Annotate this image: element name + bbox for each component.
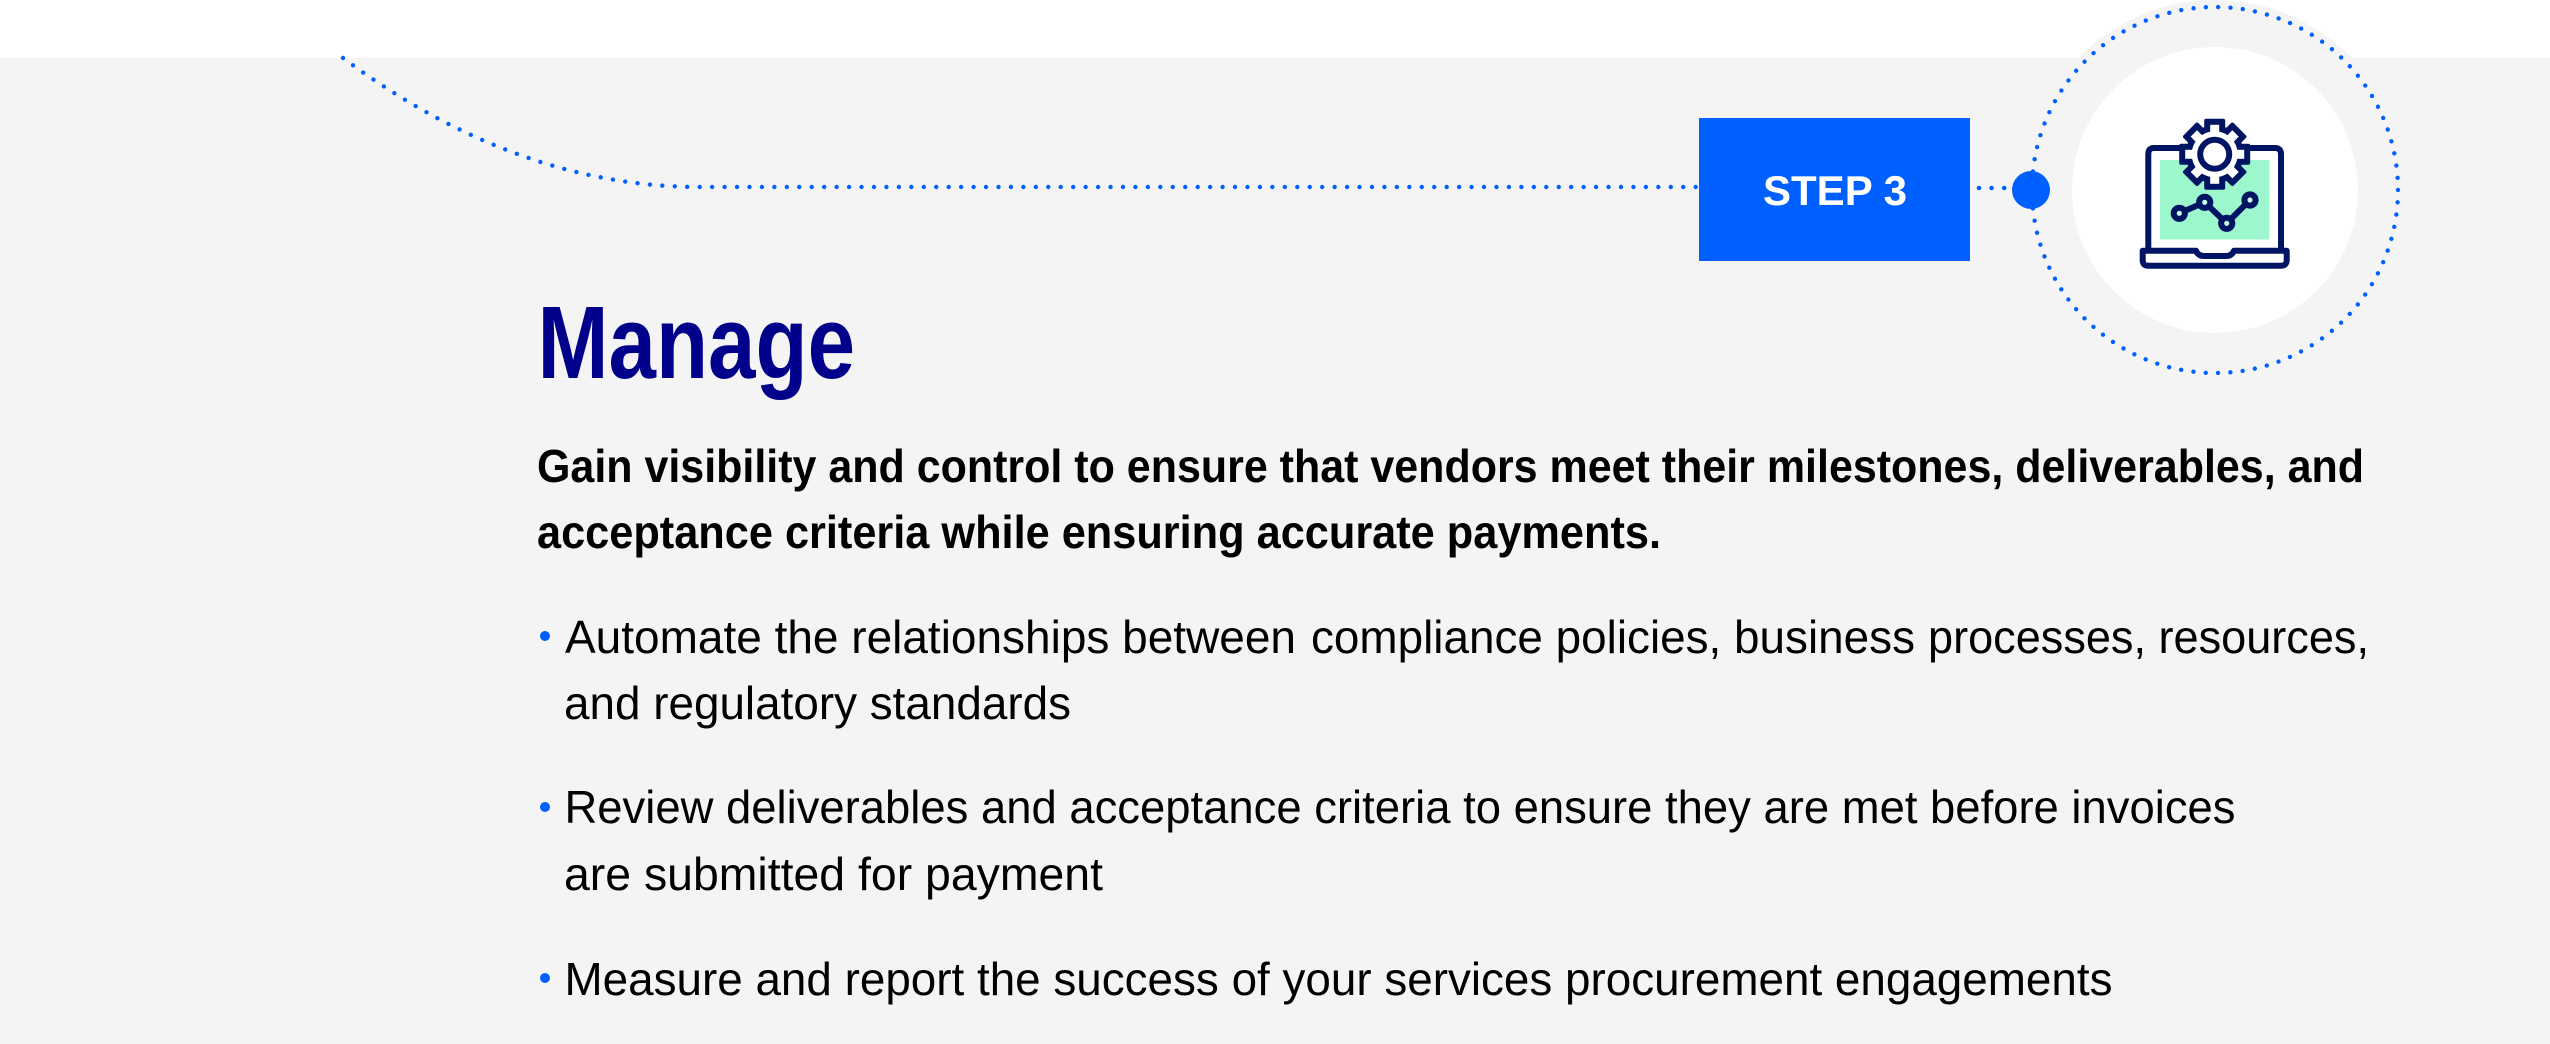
- bullet 3: Measure and report the success of your services procurement engagements: [564, 953, 2112, 1005]
- title: Manage: [538, 285, 855, 400]
- icon: gear: [2179, 119, 2250, 190]
- bullet 2: Review deliverables and acceptance criteria to ensure they are met before invoices: [564, 781, 2236, 833]
- icon badge: dotted ring and laptop: [1979, 0, 2405, 380]
- icon: line chart: [2174, 194, 2256, 229]
- dotted connector curve: [343, 58, 1699, 187]
- bullet 1: processes, resources,: [1928, 611, 2369, 663]
- bullet list: [540, 611, 2369, 1005]
- icon: laptop with gear and chart: [2143, 119, 2287, 266]
- bullet 1: [540, 611, 2369, 729]
- step badge: STEP 3: [1763, 167, 1907, 214]
- blue node: [2012, 171, 2050, 209]
- bullet 2: are submitted for payment: [564, 848, 1103, 900]
- step badge: [1699, 118, 1970, 261]
- intro text: acceptance criteria while ensuring accurate payments.: [537, 506, 1661, 558]
- bullet 2: [540, 781, 2236, 900]
- bullet 1: and regulatory standards: [564, 677, 1071, 729]
- connector dots to node: [1979, 186, 2006, 190]
- bullet 1: Automate the relationships between: [565, 611, 1296, 663]
- intro text: [537, 440, 2364, 558]
- intro text: Gain visibility and control to ensure that vendors meet their milestones, deliverables, and: [537, 440, 2364, 492]
- bullet 1: compliance policies, business: [1311, 611, 1915, 663]
